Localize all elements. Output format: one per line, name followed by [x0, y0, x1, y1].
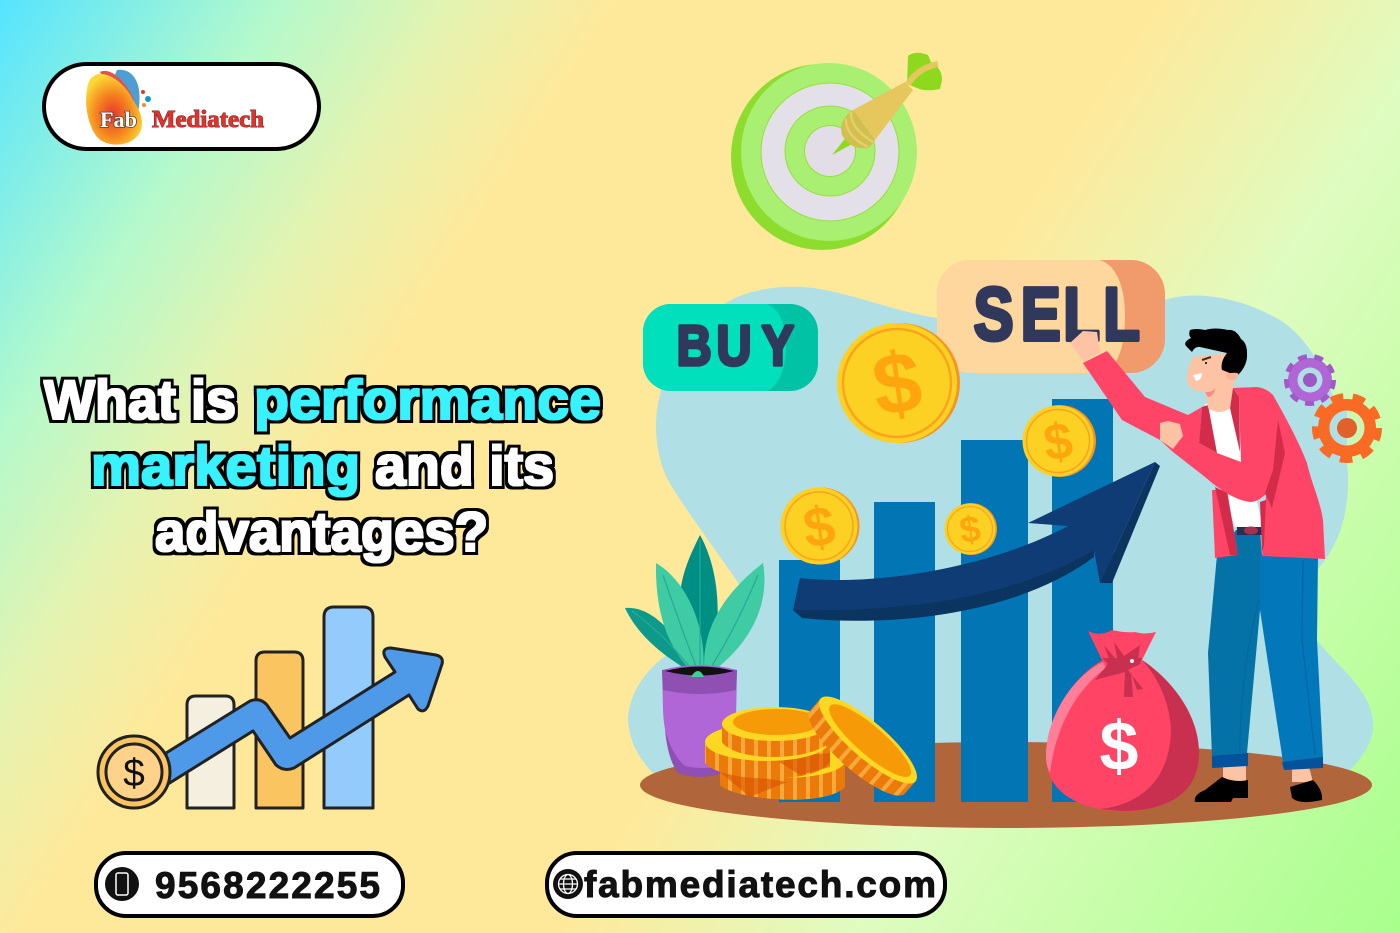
logo word: Fab: Fab [100, 107, 137, 132]
character: man reaching for SELL [1070, 328, 1325, 802]
icon: coin left [780, 488, 860, 564]
title: What is [44, 368, 236, 431]
logo word: Mediatech: Mediatech [152, 107, 264, 133]
button: SELL: SELL [974, 274, 1140, 357]
logo pill [44, 64, 319, 149]
icon: purple gear [1286, 356, 1334, 404]
icon: coin stack [705, 685, 927, 807]
icon: money bag: $ [1100, 707, 1138, 785]
man: trousers [1208, 530, 1323, 770]
icon: coin left: $ [799, 493, 839, 560]
plant in pot [625, 535, 764, 777]
ground ellipse [640, 742, 1372, 828]
icon: small dollar coin: $ [123, 752, 145, 795]
icon: target with dart [731, 53, 942, 250]
bar: small orange [256, 652, 303, 808]
icon: coin upper right [1022, 405, 1096, 477]
icon: orange gear [1316, 396, 1378, 460]
title: and its [375, 434, 554, 497]
man: jacket [1083, 351, 1325, 559]
phone number: 9568222255 [155, 865, 380, 906]
phone pill [96, 853, 403, 916]
bar: small blue [324, 607, 373, 808]
small growth chart [98, 607, 442, 808]
button: BUY: BUY [677, 314, 794, 378]
coin: leaning [798, 685, 927, 807]
pot [662, 665, 737, 777]
title: advantages? [155, 500, 488, 563]
man: hands [1070, 331, 1183, 449]
icon: globe [553, 869, 583, 899]
icon: logo blob [86, 70, 151, 145]
coin: middle of stack [705, 723, 830, 779]
icon: coin small: $ [957, 508, 984, 551]
icon: large coin: $ [867, 333, 928, 435]
button: BUY [643, 304, 818, 391]
title [44, 368, 601, 563]
icon: phone [105, 867, 139, 901]
icon: coin upper right: $ [1040, 411, 1076, 472]
icon: small dollar coin [98, 736, 170, 808]
arrow: large rising navy [793, 462, 1160, 621]
man: head and hair [1185, 328, 1247, 412]
icon: coin small [944, 503, 997, 555]
man: shirt and belt [1205, 404, 1263, 535]
plant leaves [625, 535, 764, 677]
icon: money bag [1046, 630, 1199, 811]
arrow: small zigzag [166, 648, 442, 784]
button: SELL [937, 260, 1165, 373]
bar: small cream [187, 696, 234, 808]
title: marketing [91, 434, 360, 497]
man: jacket lapels and folds [1199, 388, 1285, 555]
icon: large coin [837, 323, 960, 443]
title: performance [254, 368, 601, 431]
man: ankles and shoes [1195, 765, 1322, 802]
coin: top of stack [722, 707, 830, 757]
coin: bottom of stack [720, 744, 845, 800]
website pill [547, 853, 945, 916]
blob: light blue backdrop [628, 287, 1373, 800]
website address: fabmediatech.com [584, 864, 936, 905]
dart [832, 53, 942, 155]
bar chart: blue bars [779, 399, 1113, 802]
